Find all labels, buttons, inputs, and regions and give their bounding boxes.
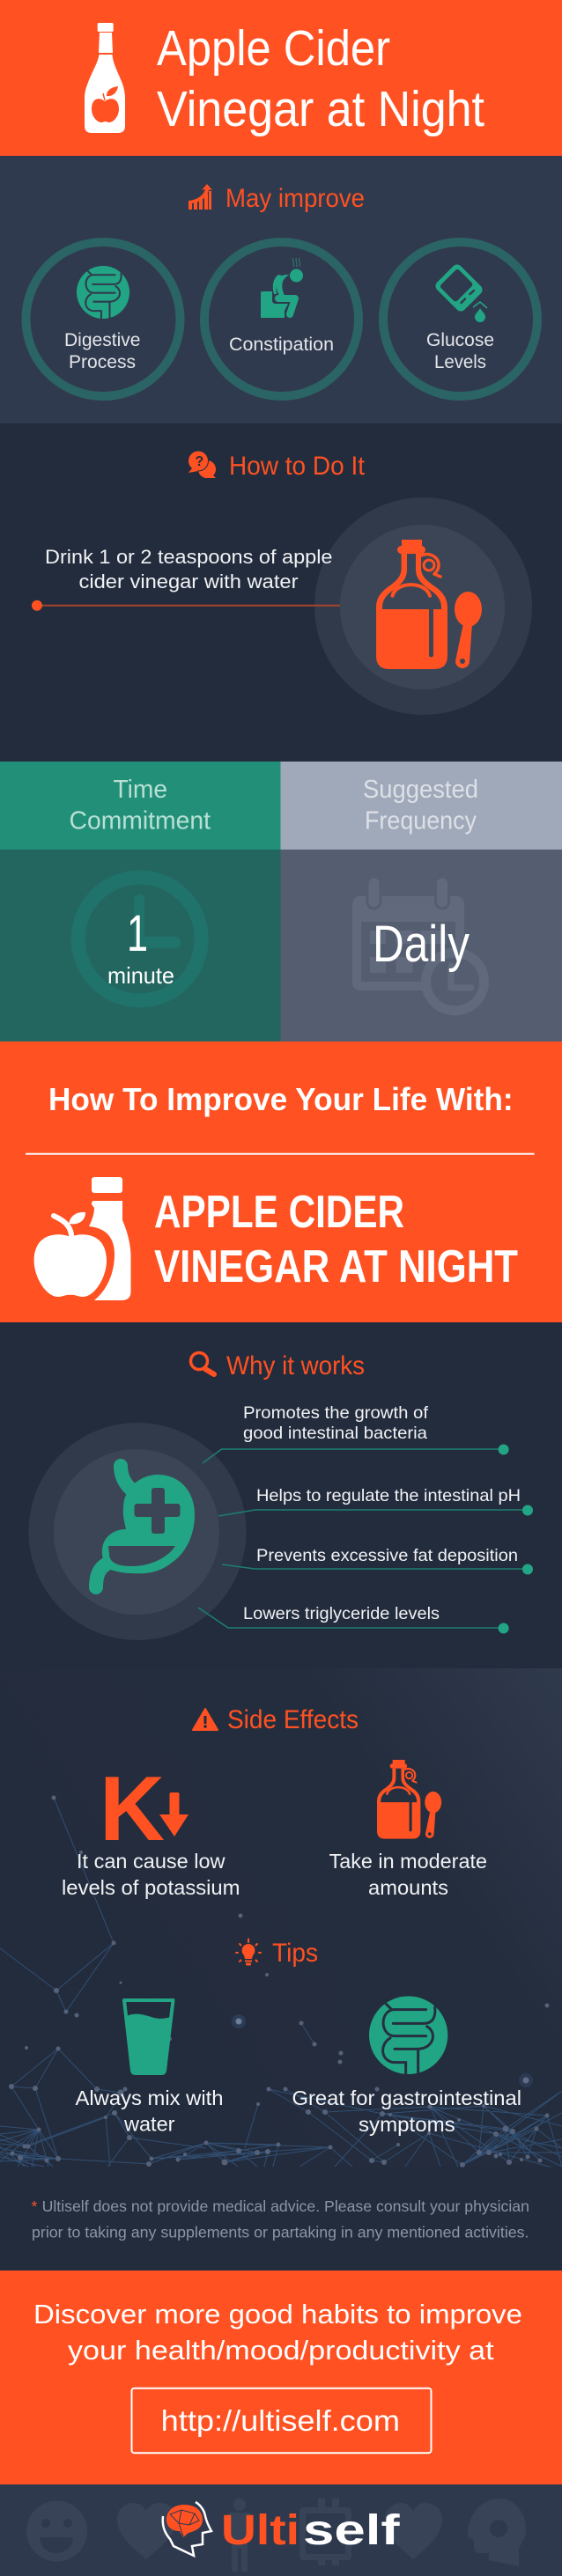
logo [163, 2502, 401, 2556]
heading: suggested frequency: Suggested [363, 776, 478, 804]
disclaimer [32, 2197, 529, 2241]
label: Process [69, 351, 136, 372]
icon: apple and bottle [34, 1177, 130, 1300]
label: Constipation [229, 334, 334, 355]
panel: may improve [0, 156, 562, 423]
disclaimer: prior to taking any supplements or partaking in any mentioned activities. [32, 2224, 529, 2241]
heading: time commitment [69, 776, 211, 835]
text: discover more [33, 2299, 522, 2366]
value: daily: Daily [373, 916, 470, 973]
panel: time commitment [0, 762, 280, 1041]
title text: Apple Cider [157, 20, 390, 77]
icon: light bulb [236, 1939, 261, 1965]
callout: pH [218, 1486, 533, 1516]
disclaimer: * [32, 2197, 37, 2215]
label [64, 329, 141, 372]
icon: glucose meter [433, 262, 487, 322]
card: constipation [204, 242, 359, 396]
instruction text: Drink 1 or 2 teaspoons of apple [45, 546, 332, 568]
icon: clock [78, 877, 202, 1000]
icon: jug and spoon [376, 540, 482, 669]
icon: calendar with clock [352, 877, 484, 1011]
icon: glass of water [124, 2000, 173, 2073]
panel: tips [76, 1939, 521, 2136]
label: Levels [434, 351, 486, 372]
label: Glucose [426, 329, 494, 350]
callout: pH: Helps to regulate the intestinal pH [256, 1486, 521, 1505]
icon: intestines [77, 266, 129, 319]
panel: side effects [62, 1705, 487, 1899]
panel: how to do it [0, 423, 562, 762]
icon: question bubbles [189, 451, 216, 478]
icon: jug and spoon small [377, 1760, 441, 1839]
callout: bacteria: Promotes the growth of [243, 1403, 429, 1423]
icon: intestines large [369, 1996, 447, 2074]
text: always mix with water [76, 2087, 223, 2136]
label [426, 329, 494, 372]
heading: how to do it: How to Do It [229, 452, 366, 481]
heading: suggested frequency: Frequency [365, 807, 477, 835]
panel: footer [0, 2484, 562, 2576]
logo wordmark: self [303, 2507, 401, 2554]
panel: call to action [0, 2271, 562, 2484]
icon: stomach with cross [96, 1466, 195, 1587]
leader line [32, 600, 340, 611]
heading: side effects: Side Effects [227, 1705, 359, 1734]
icon: question bubbles: ? [196, 454, 203, 469]
banner title [154, 1187, 518, 1292]
circles behind stomach [28, 1423, 247, 1640]
banner title: APPLE CIDER [154, 1187, 404, 1238]
label: Digestive [64, 329, 141, 350]
text: always mix with water: water [123, 2113, 175, 2136]
card: digestive process [26, 242, 180, 396]
text: always mix with water: Always mix with [76, 2087, 223, 2109]
logo wordmark [221, 2507, 401, 2554]
panel: how to improve banner [0, 1041, 562, 1322]
text: discover more: your health/mood/productivity at [68, 2335, 494, 2366]
banner heading: How To Improve Your Life With: [48, 1081, 514, 1117]
icon: rising chart [189, 184, 212, 210]
value: 1 minute [107, 905, 174, 989]
heading: time commitment: Commitment [69, 807, 211, 835]
circles behind bottle [314, 497, 532, 715]
heading: time commitment: Time [113, 776, 167, 804]
card: glucose levels [383, 242, 537, 396]
text: moderate amounts: Take in moderate [329, 1850, 487, 1873]
heading: tips: Tips [272, 1939, 318, 1968]
text: low potassium [62, 1850, 240, 1899]
heading: suggested frequency [363, 776, 478, 835]
button: website: http://ultiself.com [161, 2404, 400, 2437]
text: low potassium: It can cause low [77, 1850, 226, 1873]
text: gastrointestinal: symptoms [359, 2113, 455, 2136]
icon: vinegar bottle with apple [85, 23, 125, 133]
icon: low potassium: K [100, 1758, 165, 1860]
button: website [132, 2388, 432, 2453]
panel: suggested frequency [280, 762, 562, 1041]
logo head [163, 2502, 211, 2556]
callout: bacteria: good intestinal bacteria [243, 1424, 427, 1443]
text: moderate amounts [329, 1850, 487, 1899]
instruction text [45, 546, 332, 592]
callout: fat deposition: Prevents excessive fat deposition [256, 1546, 518, 1565]
callout: bacteria [203, 1403, 509, 1463]
value: 1 minute: minute [107, 962, 174, 989]
icon: magnifier [190, 1352, 214, 1374]
instruction text: cider vinegar with water [79, 570, 299, 592]
panel: why it works [28, 1351, 533, 1640]
panel: night network background [0, 1668, 562, 2170]
callout: triglycerides [198, 1604, 509, 1634]
title text: Vinegar at Night [157, 81, 484, 137]
panel: title header [0, 0, 562, 156]
faint icons [26, 2499, 526, 2572]
icon: person on toilet [261, 258, 303, 318]
value: 1 minute: 1 [127, 905, 148, 962]
callout: triglycerides: Lowers triglyceride levels [243, 1604, 440, 1623]
callout: fat deposition [222, 1546, 533, 1574]
logo wordmark: Ulti [221, 2507, 299, 2554]
heading: why it works: Why it works [226, 1351, 365, 1380]
text: discover more: Discover more good habits to improve [33, 2299, 522, 2329]
disclaimer: Ultiself does not provide medical advice. Please consult your physician [42, 2197, 529, 2215]
text: moderate amounts: amounts [368, 1876, 448, 1899]
title text [157, 20, 484, 137]
text: low potassium: levels of potassium [62, 1876, 240, 1899]
icon: warning triangle [193, 1709, 218, 1730]
heading: may improve: May improve [226, 184, 365, 213]
text: gastrointestinal [292, 2087, 521, 2136]
text: gastrointestinal: Great for gastrointestinal [292, 2087, 521, 2109]
